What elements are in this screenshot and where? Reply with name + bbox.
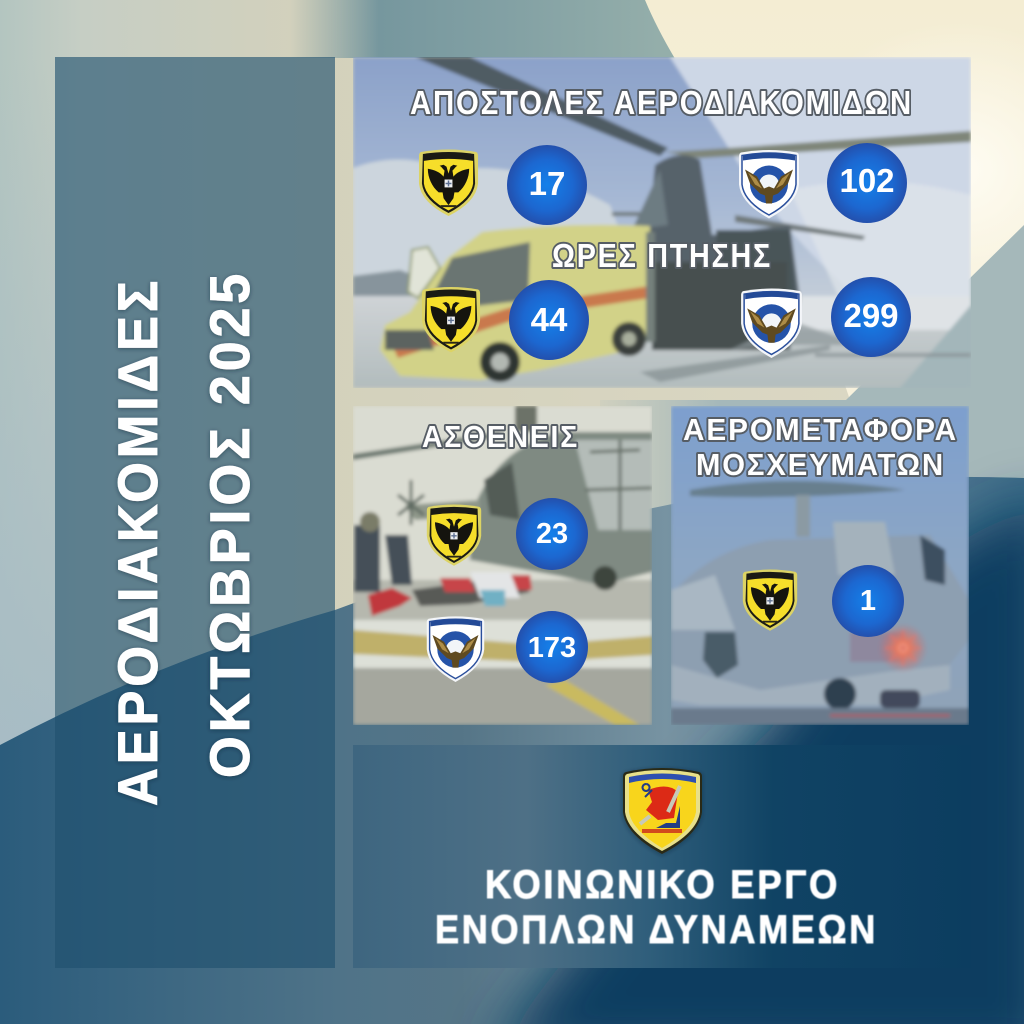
icon: air force badge, patients xyxy=(427,616,484,682)
icon: army badge, patients xyxy=(427,505,481,566)
stat: air force hours 299 xyxy=(831,277,911,357)
stat: army patients 23: 23 xyxy=(536,518,568,550)
panel: air ambulance missions and flight hours xyxy=(353,57,971,388)
panel: footer social work xyxy=(353,745,971,968)
stat: air force patients 173: 173 xyxy=(528,632,576,664)
icon: air force badge, hours xyxy=(741,289,802,358)
panel: patients xyxy=(353,406,652,725)
title: month and year: ΑΕΡΟΔΙΑΚΟΜΙΔΕΣ xyxy=(106,277,169,806)
icon: army badge, hours xyxy=(422,287,480,352)
heading: footer line 1: ΚΟΙΝΩΝΙΚΟ ΕΡΓΟ xyxy=(485,863,840,907)
heading: missions: ΑΠΟΣΤΟΛΕΣ ΑΕΡΟΔΙΑΚΟΜΙΔΩΝ xyxy=(410,84,913,121)
stat: army patients 23 xyxy=(516,498,588,570)
stat: air force hours 299: 299 xyxy=(843,297,899,334)
panel: left title block xyxy=(55,57,335,968)
icon: joint forces badge xyxy=(623,768,702,854)
heading: patients: ΑΣΘΕΝΕΙΣ xyxy=(422,419,579,454)
stat: army hours 44: 44 xyxy=(531,301,568,338)
icon: air force badge, missions xyxy=(739,150,799,218)
stat: army vaccine flights 1: 1 xyxy=(860,585,876,617)
title: month and year: ΟΚΤΩΒΡΙΟΣ 2025 xyxy=(198,270,261,778)
heading: footer line 2: ΕΝΟΠΛΩΝ ΔΥΝΑΜΕΩΝ xyxy=(435,908,878,952)
heading: flight hours: ΩΡΕΣ ΠΤΗΣΗΣ xyxy=(552,237,772,274)
icon: army badge, vaccines xyxy=(743,570,797,631)
title: month and year xyxy=(106,270,261,806)
stat: army vaccine flights 1 xyxy=(832,565,904,637)
heading: vaccine transport line 1: ΑΕΡΟΜΕΤΑΦΟΡΑ xyxy=(683,412,958,447)
stat: army hours 44 xyxy=(509,280,589,360)
icon: army badge, missions xyxy=(419,150,478,216)
stat: air force missions 102 xyxy=(827,143,907,223)
stat: army missions 17 xyxy=(507,145,587,225)
stat: army missions 17: 17 xyxy=(529,165,565,202)
panel: vaccine air transport xyxy=(671,406,969,725)
heading: vaccine transport line 2: ΜΟΣΧΕΥΜΑΤΩΝ xyxy=(696,447,945,482)
stat: air force missions 102: 102 xyxy=(839,162,895,199)
stat: air force patients 173 xyxy=(516,611,588,683)
ambulance xyxy=(380,225,652,380)
